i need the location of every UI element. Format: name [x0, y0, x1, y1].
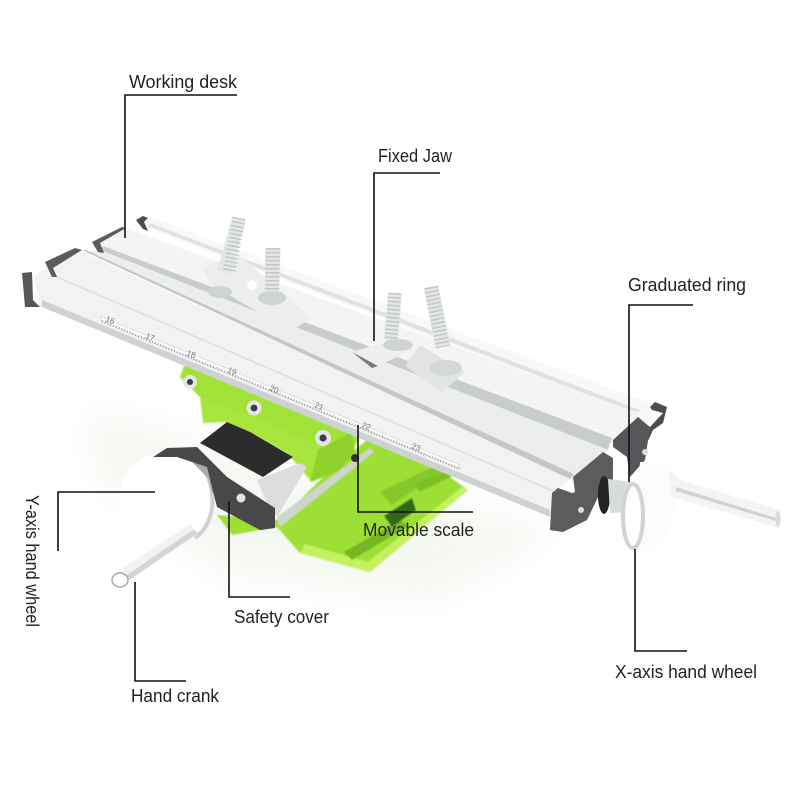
left end caps: [22, 272, 40, 307]
movable scale: 21: [313, 401, 325, 412]
rear clamp plate: [202, 254, 312, 331]
graduated ring: [193, 461, 223, 493]
base plate: [217, 440, 468, 572]
label: Graduated ring: [628, 275, 746, 482]
label: Safety cover: [229, 501, 329, 627]
label: Hand crank: Hand crank: [131, 686, 220, 706]
wheel: [632, 462, 676, 552]
front jaw plate: [352, 338, 412, 366]
movable scale: 18: [185, 349, 197, 360]
crank: [113, 524, 198, 585]
working desk table: [22, 216, 667, 532]
label: Hand crank: [131, 582, 220, 706]
base slots: [344, 520, 408, 560]
fixed jaw clamps: [202, 218, 465, 392]
front bolts: [391, 293, 395, 340]
label: Graduated ring: Graduated ring: [628, 275, 746, 295]
label: Y-axis hand wheel: [22, 492, 155, 627]
label: X-axis hand wheel: X-axis hand wheel: [615, 662, 757, 682]
label: Safety cover: Safety cover: [234, 607, 329, 627]
right end caps: [647, 402, 667, 443]
Y-axis hand wheel: [112, 453, 223, 587]
X-axis hand wheel: [598, 462, 780, 552]
movable scale: [100, 315, 460, 469]
grey cover: [153, 447, 275, 530]
label: Fixed Jaw: [374, 146, 453, 341]
graduated ring: [598, 476, 610, 514]
movable scale: 19: [226, 366, 238, 377]
slide rail: [257, 463, 307, 517]
label: Y-axis hand wheel: Y-axis hand wheel: [22, 495, 42, 627]
label: Fixed Jaw: Fixed Jaw: [378, 146, 453, 166]
green base: [180, 363, 468, 572]
wheel: [119, 453, 211, 545]
shaft: [668, 470, 780, 528]
label: Working desk: [125, 72, 238, 238]
front slab face: [34, 252, 572, 516]
gap between slabs: [85, 250, 608, 478]
middle slab: [95, 228, 650, 444]
slide rail on base: [277, 448, 374, 527]
movable scale: 23: [410, 442, 422, 453]
middle groove: [100, 246, 612, 450]
label: Movable scale: Movable scale: [363, 520, 474, 540]
black pad: [200, 422, 293, 477]
soft shadow: [90, 410, 560, 600]
movable scale: 22: [360, 421, 372, 432]
safety cover: [153, 422, 307, 530]
movable scale: 17: [144, 332, 156, 343]
front slab groove: [82, 250, 574, 479]
label: Movable scale: [358, 425, 474, 540]
label: X-axis hand wheel: [615, 549, 757, 682]
rear rail: [145, 217, 655, 422]
rear bolts: [224, 218, 239, 272]
movable scale: 16: [104, 315, 116, 326]
movable scale: 20: [268, 384, 280, 395]
bracket bolts: [183, 375, 359, 462]
upright bracket: [180, 363, 360, 482]
label: Working desk: Working desk: [129, 72, 238, 92]
